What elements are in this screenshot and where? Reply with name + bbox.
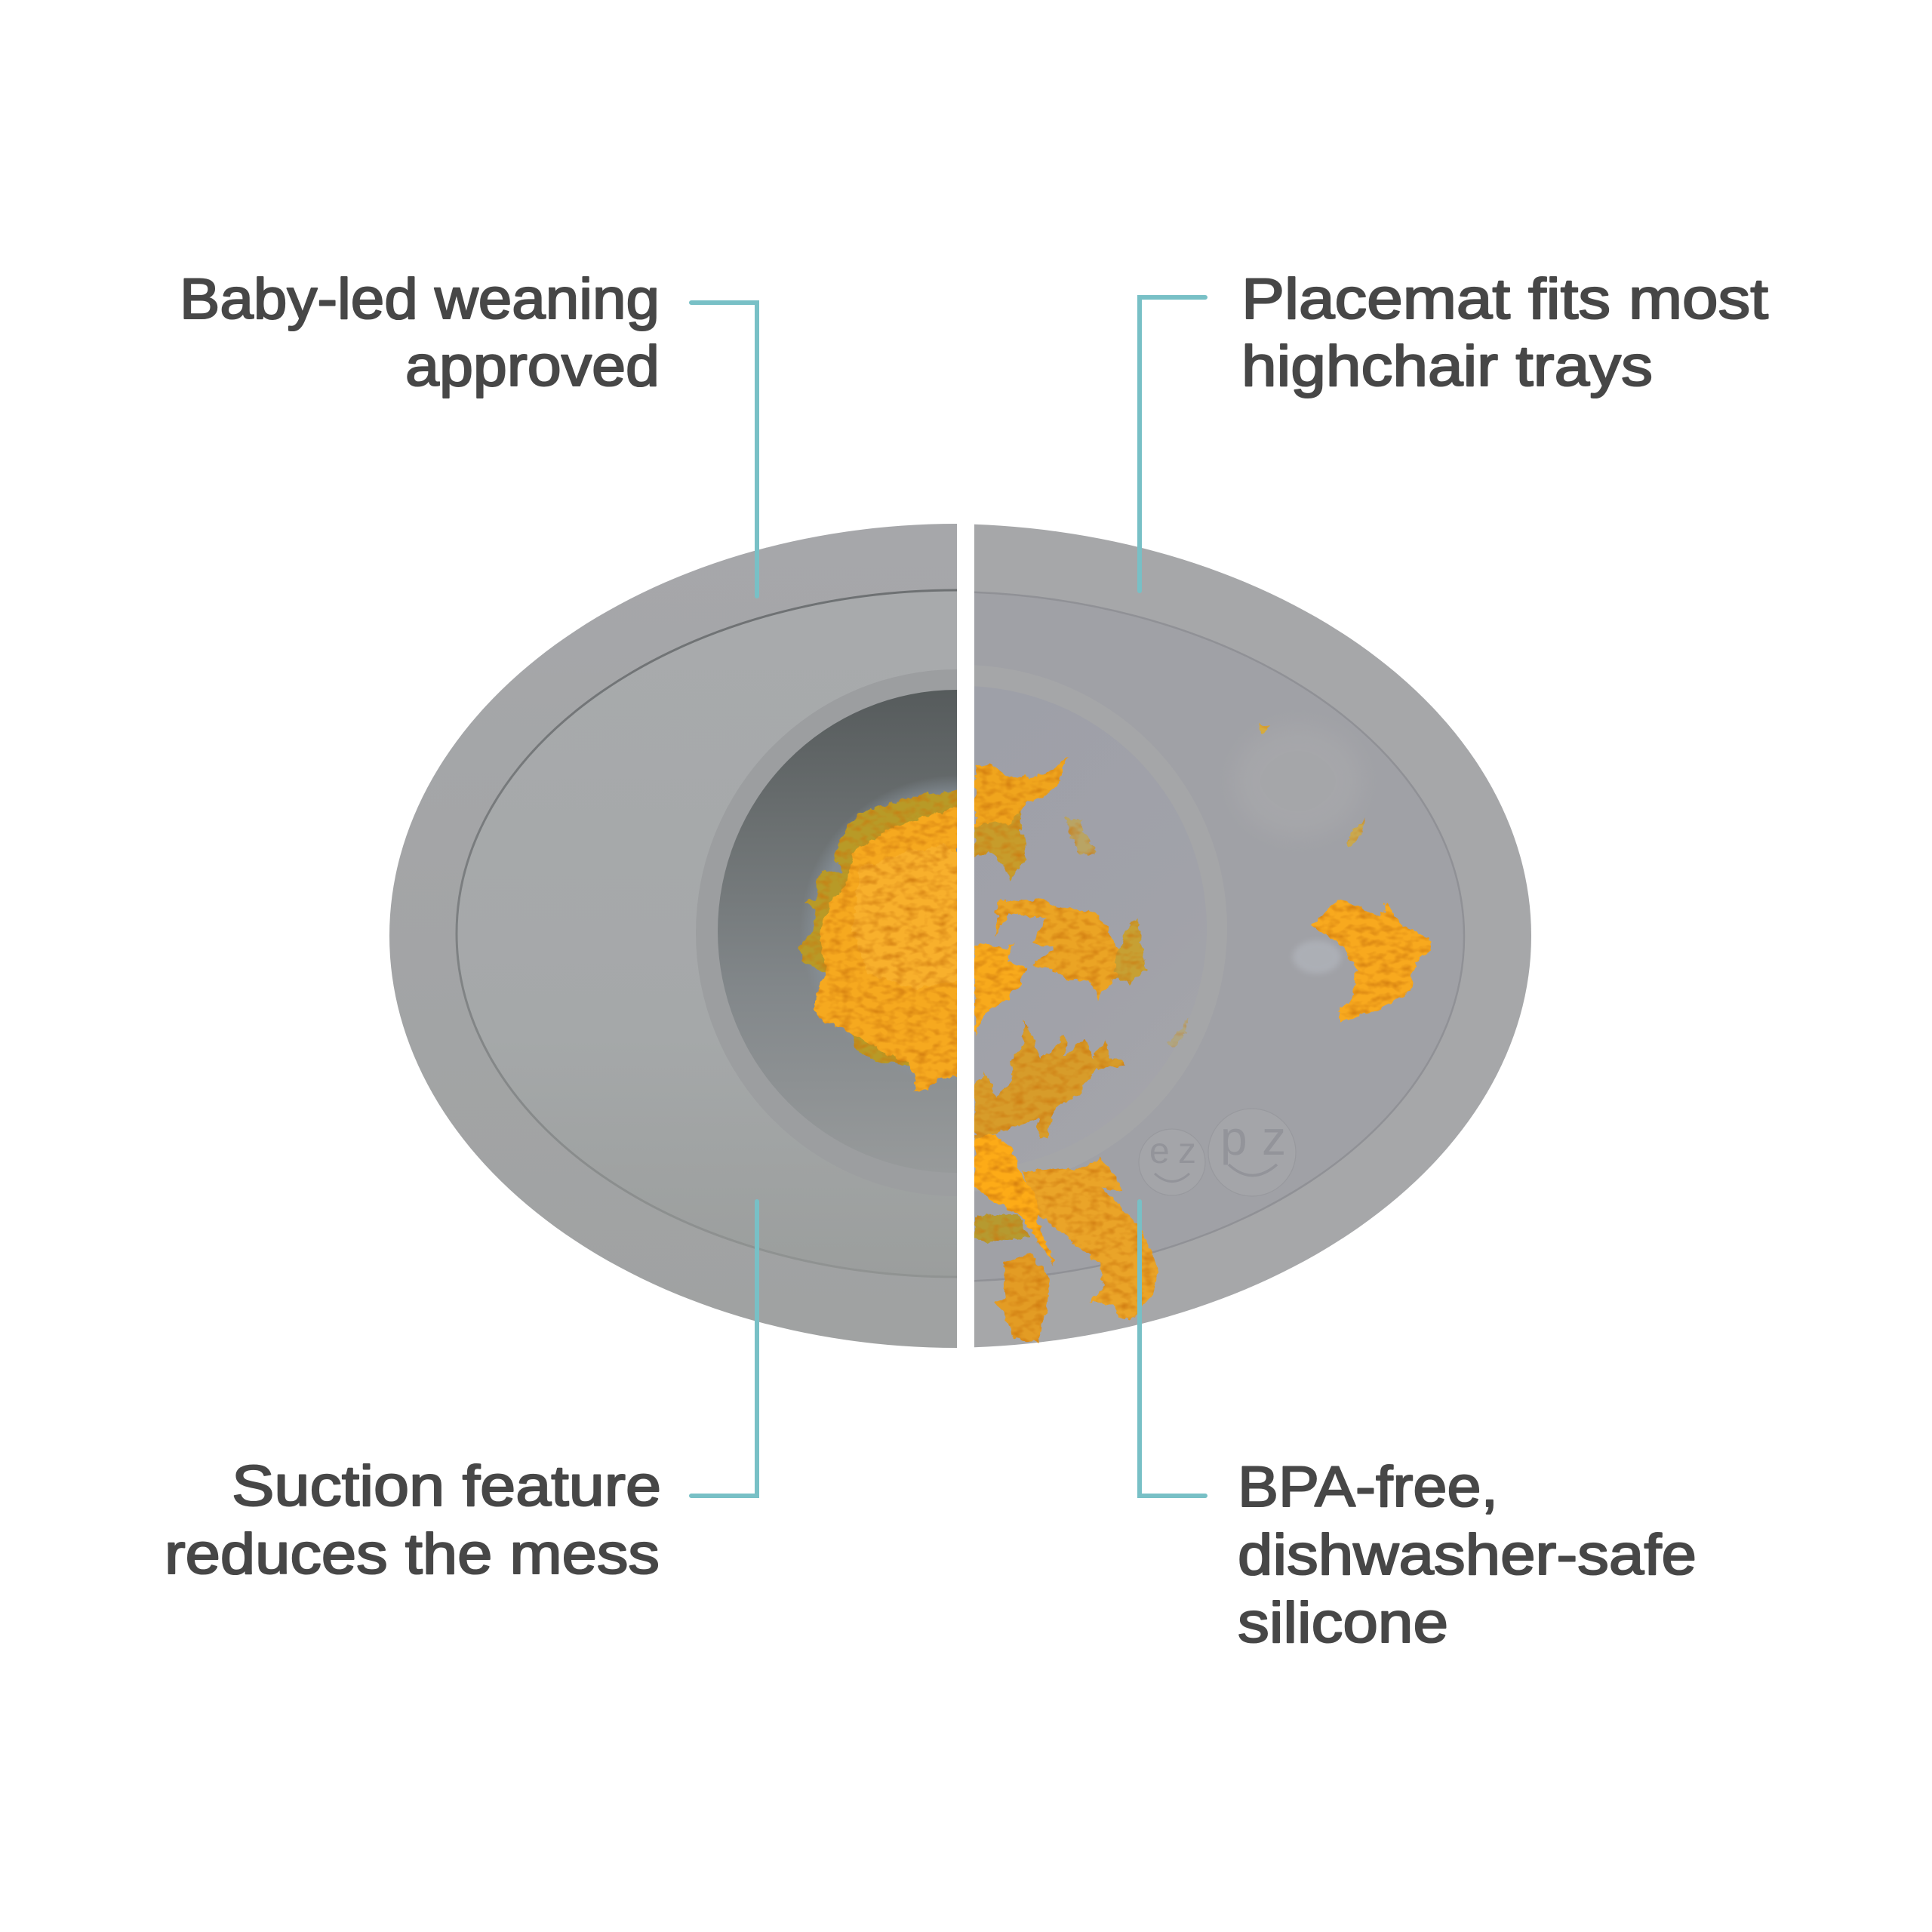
- callout text: BPA-free,: [1238, 1455, 1498, 1519]
- callout text: approved: [405, 334, 660, 398]
- crumb on bowl rim edge: [1200, 926, 1206, 932]
- connector line: [1140, 1201, 1205, 1496]
- callout text: [1238, 1455, 1697, 1655]
- icon: ezpz embossed logo: [1139, 1109, 1296, 1196]
- food: tiny crumb: [1259, 723, 1271, 734]
- bowl rim (left): [696, 669, 957, 1105]
- connector line: [1140, 297, 1205, 591]
- placemat outer rim (right): [974, 524, 1531, 1348]
- food: blob top of bowl: [974, 764, 1025, 881]
- food: pile under bowl: [1023, 1158, 1158, 1320]
- icon: ezpz embossed logo: pz: [1220, 1111, 1286, 1165]
- panel: right half, messy placemat after eating: [974, 524, 1531, 1348]
- food: spill on bowl rim: [1168, 1017, 1189, 1048]
- callout: Suction feature reduces the mess: [165, 1201, 757, 1586]
- connector line: [691, 303, 757, 596]
- connector line: [691, 1201, 757, 1496]
- icon: ezpz embossed logo: ez: [1149, 1131, 1196, 1171]
- callout text: [165, 1454, 661, 1586]
- placemat inner surface (right): [974, 592, 1466, 1281]
- food: bottom piece: [993, 1253, 1051, 1343]
- food: bright piece over bowl edge: [974, 1134, 1055, 1265]
- placemat outer rim (left): [389, 524, 957, 1348]
- food: full portion of shredded orange food: [798, 790, 958, 1092]
- callout: BPA-free, dishwasher-safe silicone: [1140, 1201, 1697, 1655]
- placemat inner surface (left): [456, 589, 957, 1278]
- callout text: dishwasher-safe: [1238, 1523, 1697, 1587]
- callout: Placemat fits most highchair trays: [1140, 267, 1768, 591]
- callout text: silicone: [1238, 1591, 1448, 1655]
- callout text: Baby-led weaning: [180, 267, 660, 331]
- food: scattered leftovers: [974, 723, 1431, 1343]
- food: sliver: [1349, 817, 1365, 848]
- food: middle blob in bowl: [1094, 913, 1146, 983]
- food: piece on placemat: [1313, 899, 1431, 1022]
- callout text: reduces the mess: [165, 1522, 660, 1586]
- bowl interior (left): [718, 690, 957, 1146]
- callout text: [1241, 267, 1768, 398]
- callout text: Placemat fits most: [1241, 267, 1768, 331]
- food: left blob in bowl: [974, 942, 1026, 1038]
- panel: left half, clean placemat with full bowl: [389, 524, 957, 1348]
- bowl floor (left): [808, 780, 957, 1054]
- water mark beside food piece: [1293, 940, 1341, 974]
- callout: Baby-led weaning approved: [180, 267, 757, 596]
- callout text: [180, 267, 660, 398]
- bowl interior (right): [718, 686, 1207, 1171]
- callout text: highchair trays: [1241, 334, 1653, 398]
- food: small smear in bowl: [1066, 817, 1096, 856]
- smear of food residue on placemat: [1234, 724, 1362, 838]
- bowl rim (right): [697, 665, 1227, 1192]
- food: lower strands in bowl: [974, 1020, 1126, 1140]
- callout text: Suction feature: [232, 1454, 661, 1518]
- food: olive smear under pile: [974, 1214, 1030, 1242]
